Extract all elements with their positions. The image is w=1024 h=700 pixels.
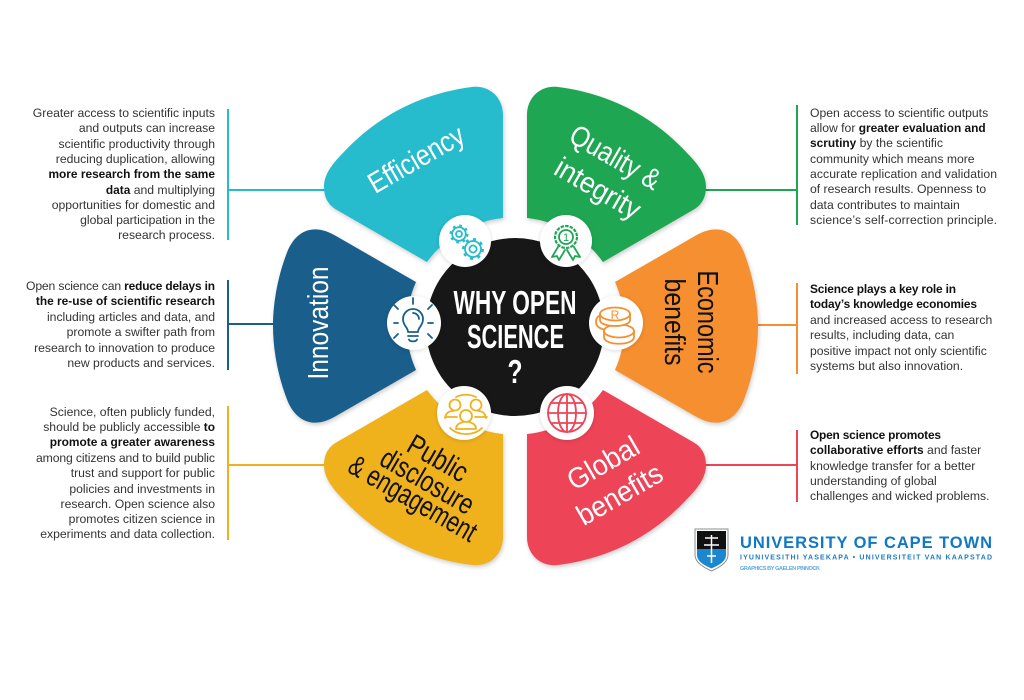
icon: globe <box>540 386 594 440</box>
text: efficiency: scientific productivity through <box>59 137 215 151</box>
text: efficiency: Greater access to scientific inputs <box>33 106 215 120</box>
text: efficiency: global participation in the <box>80 213 215 227</box>
text: public disclosure <box>36 405 215 541</box>
text: quality: of research results. Openness to <box>810 182 986 196</box>
text: quality: data contributes to maintain <box>810 198 960 212</box>
petal: Public disclosure and engagement <box>324 390 503 565</box>
leader line: quality <box>704 105 797 225</box>
text: public disclosure: promotes citizen science in <box>69 512 215 526</box>
text: efficiency: data and multiplying <box>106 183 215 197</box>
petal title: Global benefits: Global <box>562 431 645 497</box>
leader line: efficiency <box>228 109 326 240</box>
text: quality: science’s self-correction principle. <box>810 213 997 227</box>
text: quality: scrutiny by the scientific <box>810 136 943 150</box>
petal title: Economic benefits: Economic <box>691 270 723 374</box>
central black circle <box>426 238 604 416</box>
petal title: Innovation: Innovation <box>303 266 335 380</box>
heading: why open science <box>454 284 576 390</box>
leader line: global <box>704 430 797 502</box>
text: public disclosure: among citizens and to build public <box>36 451 215 465</box>
petal title: Quality and integrity: Quality & <box>564 119 666 197</box>
petal title: Public disclosure and engagement: & engagement <box>343 450 482 549</box>
text: economic: positive impact not only scientific <box>810 344 987 358</box>
text: efficiency <box>33 106 215 242</box>
icon: coins <box>589 296 643 350</box>
text: quality: community which means more <box>810 152 975 166</box>
logo: university wordmark: IYUNIVESITHI YASEKAPA • UNIVERSITEIT VAN KAAPSTAD <box>740 554 992 562</box>
petal title: Economic benefits <box>658 270 723 374</box>
text: economic: today’s knowledge economies <box>810 297 977 311</box>
petal title: Public disclosure and engagement: Public <box>401 429 474 489</box>
text: innovation: research to innovation to produce <box>34 341 215 355</box>
text: public disclosure: trust and support for public <box>71 466 215 480</box>
icon: award rosette: 1 <box>563 232 569 244</box>
text: public disclosure: policies and investments in <box>69 482 215 496</box>
text: quality <box>810 106 997 227</box>
text: efficiency: and outputs can increase <box>79 121 215 135</box>
petal title: Quality and integrity: integrity <box>549 152 647 227</box>
text: quality: Open access to scientific outputs <box>810 106 988 120</box>
petal: Innovation <box>273 229 416 423</box>
petal: Global benefits <box>527 390 706 565</box>
text: public disclosure: Science, often publicly funded, <box>50 405 215 419</box>
text: public disclosure: promote a greater awareness <box>50 435 215 449</box>
text: innovation: the re-use of scientific research <box>36 294 215 308</box>
text: economic: systems but also innovation. <box>810 359 963 373</box>
text: global <box>810 428 990 503</box>
logo: university wordmark <box>740 534 992 562</box>
leader line: innovation <box>228 280 274 370</box>
text: efficiency: opportunities for domestic and <box>52 198 215 212</box>
text: global: knowledge transfer for a better <box>810 459 975 473</box>
text: global: understanding of global <box>810 474 937 488</box>
leader line: public disclosure <box>228 406 326 540</box>
text: innovation: Open science can reduce delays in <box>26 279 215 293</box>
text: quality: accurate replication and validation <box>810 167 997 181</box>
heading: why open science: WHY OPEN <box>454 284 576 321</box>
logo: university crest <box>695 529 728 571</box>
text: economic: and increased access to research <box>810 313 992 327</box>
text: public disclosure: research. Open science also <box>61 497 215 511</box>
petal: Quality and integrity <box>527 87 706 262</box>
text: global: collaborative efforts and faster <box>810 443 981 457</box>
text: efficiency: research process. <box>118 228 215 242</box>
petal title: Global benefits: benefits <box>571 458 669 532</box>
credit: graphics by: GRAPHICS BY GAELEN PINNOCK <box>740 566 820 572</box>
text: global: challenges and wicked problems. <box>810 489 990 503</box>
petal title: Efficiency: Efficiency <box>363 119 471 200</box>
icon: light bulb <box>387 296 441 350</box>
petal: Economic benefits <box>615 229 758 423</box>
text: innovation: promote a swifter path from <box>67 325 215 339</box>
text: public disclosure: experiments and data collection. <box>40 527 215 541</box>
heading: why open science: SCIENCE <box>467 318 564 355</box>
petal: Efficiency <box>324 87 503 262</box>
text: quality: allow for greater evaluation and <box>810 121 986 135</box>
logo: university wordmark: UNIVERSITY OF CAPE TOWN <box>740 534 992 552</box>
heading: why open science: ? <box>508 353 522 390</box>
leader line: economic <box>756 283 797 374</box>
icon: gears <box>439 215 491 267</box>
text: efficiency: reducing duplication, allowing <box>56 152 215 166</box>
petal title: Public disclosure and engagement: disclosure <box>374 442 480 522</box>
petal title: Economic benefits: benefits <box>658 278 690 366</box>
petal title: Public disclosure and engagement <box>343 429 482 549</box>
text: innovation: including articles and data, and <box>47 310 215 324</box>
icon: award rosette <box>540 215 592 267</box>
text: efficiency: more research from the same <box>48 167 215 181</box>
text: public disclosure: should be publicly accessible to <box>43 420 215 434</box>
text: innovation <box>26 279 215 370</box>
text: global: Open science promotes <box>810 428 941 442</box>
icon: people in circle <box>437 386 491 440</box>
petal title: Global benefits <box>562 431 669 532</box>
text: innovation: new products and services. <box>67 356 215 370</box>
text: economic: Science plays a key role in <box>810 282 956 296</box>
text: economic: results, including data, can <box>810 328 954 342</box>
petal title: Quality and integrity <box>549 119 666 227</box>
icon: coins: R <box>611 308 620 322</box>
text: economic <box>810 282 992 373</box>
